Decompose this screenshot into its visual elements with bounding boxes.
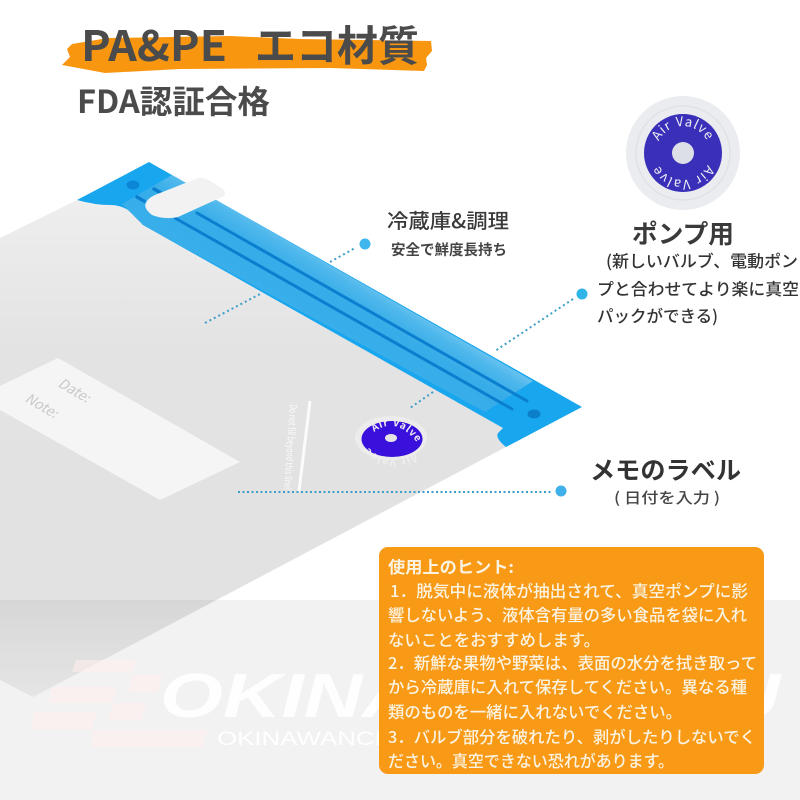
air valve on bag: Air Valve	[367, 448, 416, 466]
panel: usage tips: 2．新鮮な果物や野菜は、表面の水分を拭き取って	[388, 650, 757, 674]
air valve on bag	[355, 416, 427, 466]
watermark band: OKINAWANCHU	[217, 729, 412, 750]
panel: usage tips: 3．バルブ部分を破れたり、剥がしたりしないでく	[388, 724, 756, 748]
zipper lighter band	[122, 175, 533, 412]
zipper holes	[126, 180, 140, 190]
panel: usage tips: 類のものを一緒に入れないでください。	[388, 699, 682, 723]
panel: usage tips: ださい。真空できない恐れがあります。	[388, 748, 674, 772]
callout: for pump	[410, 214, 799, 408]
callout: memo label	[238, 451, 741, 508]
panel: usage tips: から冷蔵庫に入れて保存してください。異なる種	[388, 674, 747, 698]
memo label	[0, 358, 240, 500]
watermark band: OKINAWANCHU	[160, 662, 783, 731]
panel: usage tips	[379, 547, 764, 774]
callout: for pump: (新しいバルブ、電動ポン	[606, 248, 798, 272]
callout: for pump: パックができる)	[597, 303, 718, 327]
bag body	[0, 190, 520, 697]
slider clip	[145, 178, 225, 218]
callout: memo label: ( 日付を入力 )	[614, 487, 720, 508]
fill line: Do not fill beyond this line!	[281, 404, 302, 491]
panel: usage tips: 1．脱気中に液体が抽出されて、真空ポンプに影	[390, 578, 748, 602]
air valve large icon: Air Valve	[652, 116, 712, 142]
callout: fridge and cooking: 安全で鮮度長持ち	[391, 239, 507, 260]
callout: for pump: ポンプ用	[632, 214, 734, 251]
panel: usage tips: 使用上のヒント:	[388, 554, 514, 578]
panel: usage tips: ないことをおすすめします。	[388, 627, 600, 651]
panel: vacuum bag	[0, 162, 582, 697]
memo label: Note:	[22, 388, 63, 423]
title	[81, 13, 419, 74]
callout: memo label: メモのラベル	[590, 451, 741, 487]
blue zipper strip	[77, 162, 582, 447]
panel: usage tips: 響しないよう、液体含有量の多い食品を袋に入れ	[388, 602, 747, 626]
air valve large icon	[626, 96, 740, 210]
title: PA&PE	[81, 13, 227, 74]
memo label: Date:	[54, 373, 95, 408]
title: エコ材質	[255, 13, 419, 74]
air valve on bag: Air Valve	[372, 421, 420, 442]
callout: fridge and cooking: 冷蔵庫&調理	[387, 205, 509, 234]
zipper channels	[137, 189, 527, 409]
watermark band	[0, 600, 800, 800]
air valve large icon: Air Valve	[654, 164, 714, 190]
fill line	[281, 401, 310, 491]
title brush stroke	[62, 36, 432, 73]
callout: for pump: プと合わせてより楽に真空	[597, 276, 799, 300]
callout: fridge and cooking	[205, 205, 509, 323]
subtitle: FDA認証合格	[77, 77, 270, 123]
